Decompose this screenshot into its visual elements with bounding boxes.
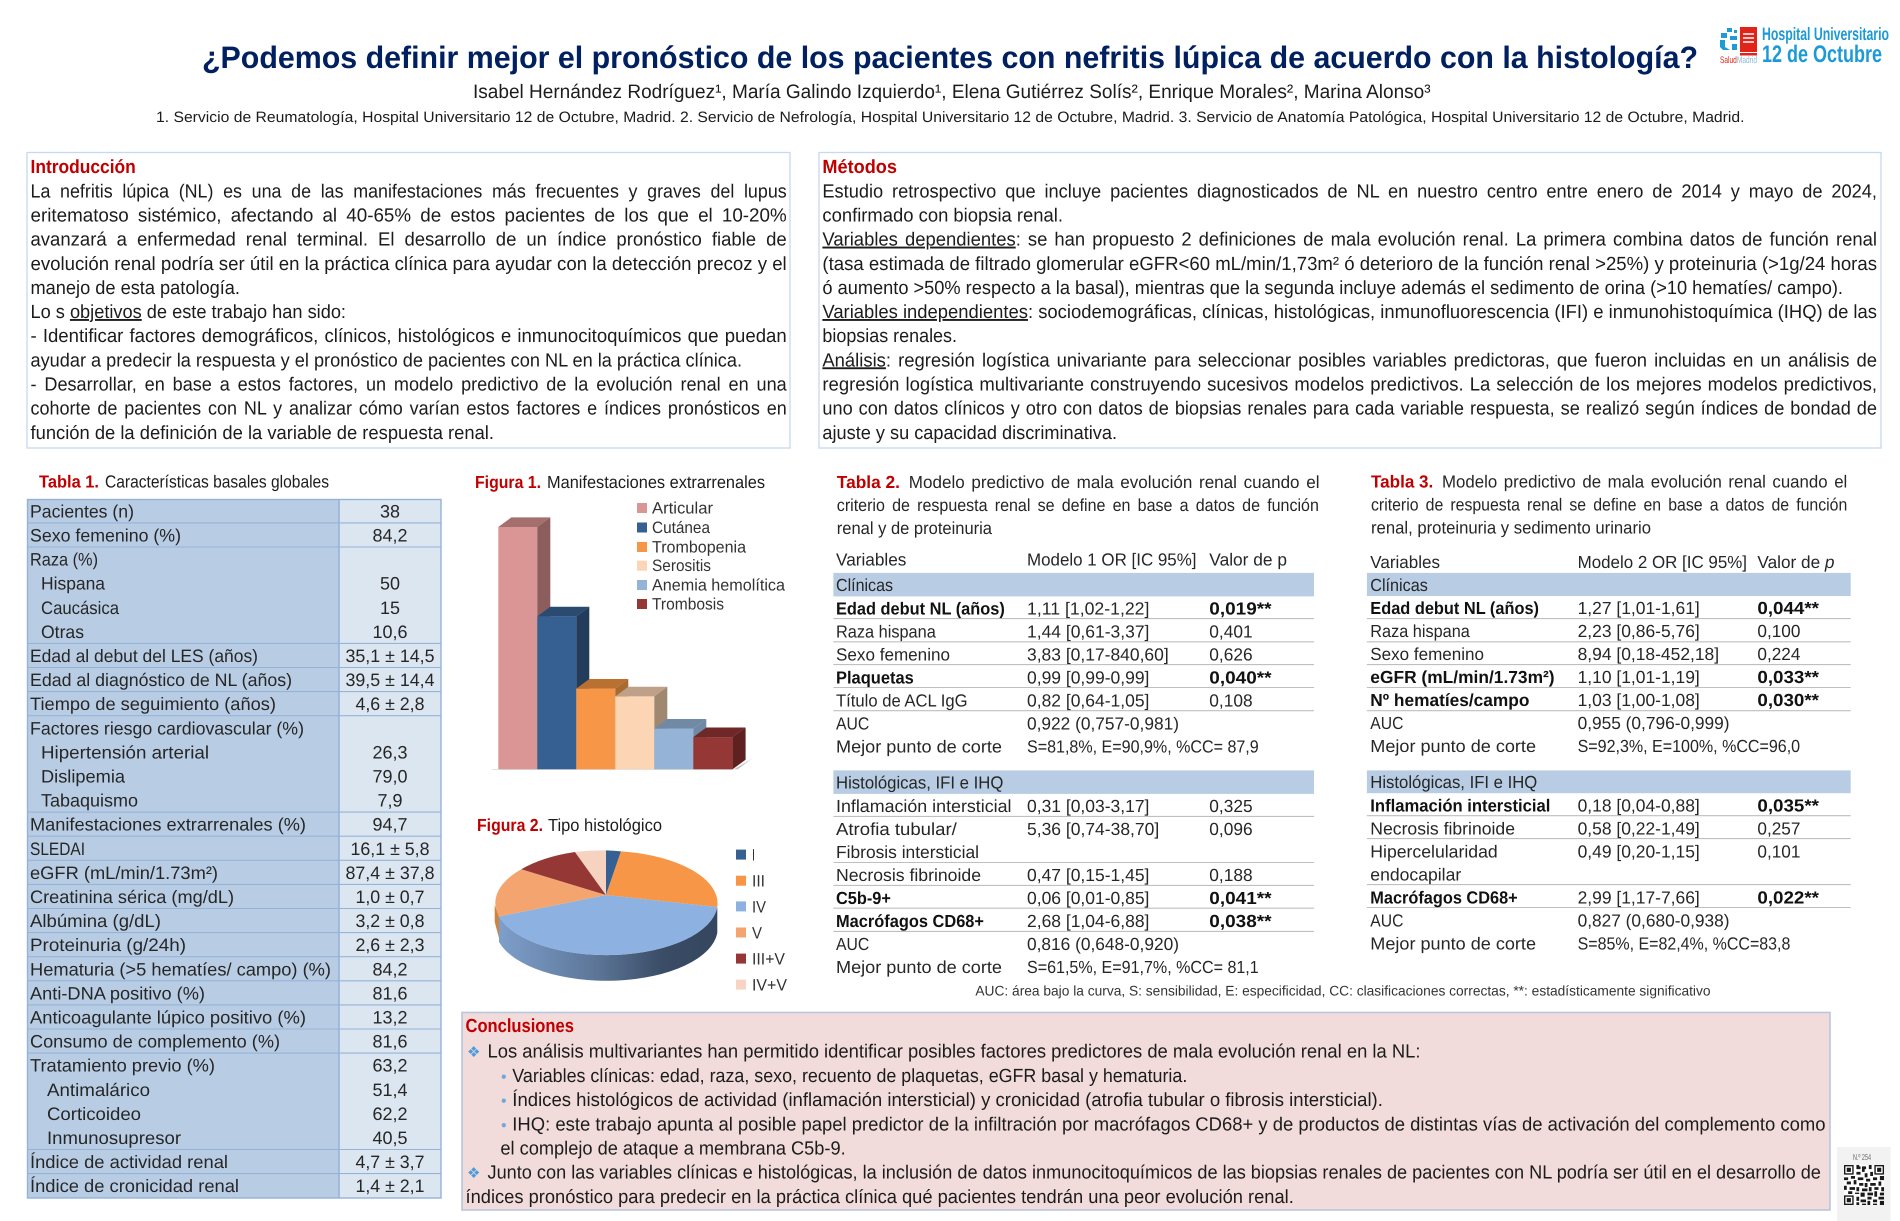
text block: introducción: avanzará a enfermedad renal terminal. El desarrollo de un índice pronóstico fiable de — [30, 230, 787, 251]
table values: tabla 1: 84,2 — [372, 526, 408, 546]
heading: tabla 2: Tabla 2. — [837, 472, 900, 492]
text block: métodos: regresión logística multivariante construyendo sucesivos modelos predictivos. La selección de los mejores modelos predictivos, — [822, 374, 1877, 396]
table column: variables, tabla 2: Edad debut NL (años) — [836, 598, 1005, 618]
table column: modelo 2, tabla 3: 2,23 [0,86-5,76] — [1578, 621, 1700, 641]
table column: valor de p, tabla 3: 0,101 — [1757, 841, 1800, 861]
table values: tabla 1: 79,0 — [372, 766, 408, 786]
text block: métodos: ó aumento >50% respecto a la basal), mientras que la segunda incluye además el sedimento de orina (>10 hematíes/ campo). — [822, 278, 1843, 299]
table column: variables, tabla 2: Necrosis fibrinoide — [836, 865, 981, 885]
table column: variables, tabla 3: Macrófagos CD68+ — [1370, 887, 1518, 907]
table column: modelo 1, tabla 2: 0,816 (0,648-0,920) — [1027, 934, 1179, 954]
text block: métodos: Análisis: regresión logística univariante para seleccionar posibles variables predictoras, que fueron incluidas en un análisis de — [822, 350, 1877, 371]
table values: tabla 1: 87,4 ± 37,8 — [346, 863, 434, 883]
table column: variables, tabla 3: Variables — [1370, 552, 1440, 572]
table values: tabla 1: 38 — [380, 501, 400, 521]
table column: valor de p, tabla 3: 0,030** — [1757, 690, 1819, 710]
table column: variables, tabla 3: Histológicas, IFI e IHQ — [1370, 772, 1537, 792]
legend: figura 1: Trombopenia — [652, 538, 747, 556]
text block: métodos: (tasa estimada de filtrado glomerular eGFR<60 mL/min/1,73m² ó deterioro de la función renal >25%) y proteinuria (>1g/24 horas — [822, 254, 1877, 275]
panel: tabla 3 — [1367, 472, 1851, 953]
text block: conclusiones: Variables clínicas: edad, raza, sexo, recuento de plaquetas, eGFR basal y hematuria. — [512, 1066, 1187, 1087]
heading: tabla 3 — [1371, 472, 1847, 538]
table values: tabla 1: 7,9 — [378, 791, 402, 811]
table column: valor de p, tabla 2: 0,038** — [1209, 911, 1272, 931]
table column: modelo 1, tabla 2: S=61,5%, E=91,7%, %CC= 81,1 — [1027, 957, 1259, 977]
table column: variables, tabla 2: Sexo femenino — [836, 644, 950, 664]
table column: modelo 2, tabla 3: 1,10 [1,01-1,19] — [1578, 667, 1700, 687]
table column: modelo 2, tabla 3: 0,955 (0,796-0,999) — [1578, 713, 1730, 733]
text block: conclusiones: • — [501, 1117, 507, 1134]
table column: modelo 1, tabla 2: 0,31 [0,03-3,17] — [1027, 796, 1149, 816]
table column: valor de p, tabla 3: 0,022** — [1757, 887, 1819, 907]
table column: valor de p, tabla 2 — [1209, 549, 1287, 931]
table column: variables, tabla 2: Mejor punto de corte — [836, 736, 1002, 756]
logo: Hospital Universitario 12 de Octubre — [1720, 24, 1889, 68]
panel: métodos — [819, 152, 1881, 448]
table column: modelo 1, tabla 2: 0,82 [0,64-1,05] — [1027, 690, 1149, 710]
legend: figura 2: III+V — [752, 950, 785, 968]
text block: conclusiones: ❖ — [467, 1164, 480, 1182]
table values: tabla 1: 3,2 ± 0,8 — [356, 911, 424, 931]
text block: conclusiones: Junto con las variables clínicas e histológicas, la inclusión de datos inmunocitoquímicos de las biopsias renales de pacientes con NL podría ser útil en el desarrollo de — [488, 1163, 1821, 1184]
table column: variables, tabla 2: Fibrosis intersticial — [836, 842, 979, 862]
authors: Isabel Hernández Rodríguez¹, María Galindo Izquierdo¹, Elena Gutiérrez Solís², Enrique Morales², Marina Alonso³ — [473, 81, 1431, 103]
table column: modelo 2, tabla 3: S=92,3%, E=100%, %CC=96,0 — [1578, 736, 1800, 756]
heading: tabla 2 — [837, 472, 1320, 538]
table row labels: tabla 1: SLEDAI — [30, 839, 85, 859]
panel: tabla 1 — [27, 472, 441, 1198]
table column: variables, tabla 3: Edad debut NL (años) — [1370, 598, 1539, 618]
text block: introducción: manejo de esta patología. — [30, 278, 240, 299]
heading: figura 2: Figura 2. — [477, 815, 543, 835]
table bands and separators: tabla 2 — [833, 573, 1314, 931]
text block: conclusiones: índices pronóstico para predecir en la práctica clínica qué pacientes tendrán una peor evolución renal. — [466, 1187, 1294, 1208]
table column: variables, tabla 3: Necrosis fibrinoide — [1370, 818, 1515, 838]
table column: modelo 1, tabla 2: 0,47 [0,15-1,45] — [1027, 865, 1149, 885]
table row labels: tabla 1: Tiempo de seguimiento (años) — [30, 694, 276, 714]
heading: tabla 2: criterio de respuesta renal se define en base a datos de función — [837, 495, 1319, 515]
table row labels: tabla 1: Caucásica — [41, 598, 120, 618]
table column: variables, tabla 2: Inflamación intersticial — [836, 796, 1012, 816]
table values: tabla 1: 16,1 ± 5,8 — [350, 839, 430, 859]
table column: variables, tabla 3: Mejor punto de corte — [1370, 933, 1536, 953]
table values: tabla 1: 26,3 — [372, 742, 408, 762]
text block: introducción — [30, 181, 787, 444]
text block: conclusiones — [466, 1042, 1826, 1208]
table column: valor de p, tabla 3: 0,100 — [1757, 621, 1801, 641]
table column: valor de p, tabla 2: 0,188 — [1209, 865, 1253, 885]
text block: conclusiones: Índices histológicos de actividad (inflamación intersticial) y cronicidad (atrofia tubular o fibrosis intersticial). — [512, 1089, 1383, 1111]
heading: métodos: Métodos — [822, 157, 897, 178]
table column: modelo 2, tabla 3: 0,49 [0,20-1,15] — [1578, 841, 1700, 861]
text block: métodos: biopsias renales. — [822, 326, 957, 347]
table column: valor de p, tabla 3: 0,257 — [1757, 818, 1800, 838]
panel: conclusiones — [462, 1012, 1830, 1210]
table column: variables, tabla 3: Inflamación intersticial — [1370, 795, 1550, 815]
text block: introducción: función de la definición de la variable de respuesta renal. — [30, 423, 494, 444]
text block: introducción: La nefritis lúpica (NL) es una de las manifestaciones más frecuentes y graves del lupus — [30, 181, 787, 202]
text block: introducción: - Identificar factores demográficos, clínicos, histológicos e inmunocitoquímicos que puedan — [30, 326, 787, 347]
icon: QR code — [1844, 1165, 1884, 1205]
table column: modelo 1, tabla 2: 1,11 [1,02-1,22] — [1027, 598, 1149, 618]
legend: figura 2 — [736, 846, 787, 994]
text block: conclusiones: IHQ: este trabajo apunta al posible papel predictor de la infiltración por macrófagos CD68+ y de productos de distintas vías de activación del complemento como — [512, 1114, 1825, 1135]
table column: variables, tabla 3: Nº hematíes/campo — [1370, 690, 1529, 710]
table row labels: tabla 1: Consumo de complemento (%) — [30, 1032, 280, 1052]
legend: figura 1: Serositis — [652, 557, 711, 575]
table values: tabla 1: 81,6 — [372, 1032, 408, 1052]
table values: tabla 1: 1,0 ± 0,7 — [356, 887, 424, 907]
table values: tabla 1: 10,6 — [372, 622, 408, 642]
table column: variables, tabla 3: AUC — [1370, 910, 1403, 930]
logo: Hospital Universitario 12 de Octubre: SaludMadrid — [1720, 55, 1757, 66]
table row labels: tabla 1: Edad al diagnóstico de NL (años) — [30, 670, 292, 690]
table row labels: tabla 1: Índice de actividad renal — [30, 1152, 228, 1172]
text block: métodos: ajuste y su capacidad discriminativa. — [822, 423, 1117, 444]
table row labels: tabla 1: Pacientes (n) — [30, 501, 134, 521]
legend: figura 2: IV — [752, 898, 766, 916]
heading: tabla 3: Tabla 3. — [1371, 472, 1433, 492]
table grid: tabla 1 — [27, 499, 441, 1198]
heading: tabla 1: Tabla 1. — [39, 472, 99, 492]
panel: figura 2 — [477, 815, 787, 994]
table values: tabla 1: 4,6 ± 2,8 — [356, 694, 424, 714]
table row labels: tabla 1: Hipertensión arterial — [41, 742, 209, 762]
table column: modelo 2, tabla 3: 0,18 [0,04-0,88] — [1578, 795, 1700, 815]
icon: Salud Madrid symbol — [1720, 27, 1757, 56]
table row labels: tabla 1: Sexo femenino (%) — [30, 526, 181, 546]
table column: modelo 1, tabla 2: 0,922 (0,757-0,981) — [1027, 713, 1179, 733]
table column: valor de p, tabla 3: 0,044** — [1757, 598, 1819, 618]
table column: variables, tabla 2: Raza hispana — [836, 621, 936, 641]
heading: tabla 3: renal, proteinuria y sedimento urinario — [1371, 518, 1651, 538]
legend: figura 2: V — [752, 924, 762, 942]
table row labels: tabla 1: Creatinina sérica (mg/dL) — [30, 887, 234, 907]
table column: valor de p, tabla 2: 0,626 — [1209, 644, 1253, 664]
text block: métodos: Variables dependientes: se han propuesto 2 definiciones de mala evolución renal. La primera combina datos de función renal — [822, 230, 1877, 251]
table column: variables, tabla 2: Macrófagos CD68+ — [836, 911, 984, 931]
table column: variables, tabla 3: eGFR (mL/min/1.73m²) — [1370, 667, 1555, 687]
heading: conclusiones: Conclusiones — [466, 1016, 574, 1037]
text block: introducción: cohorte de pacientes con NL y analizar cómo varían estos factores e índices pronósticos en — [30, 399, 787, 420]
panel: tabla 2 — [833, 472, 1320, 977]
legend: figura 1: Articular — [652, 500, 714, 518]
affiliations: 1. Servicio de Reumatología, Hospital Universitario 12 de Octubre, Madrid. 2. Servicio de Nefrología, Hospital Universitario 12 de Octubre, Madrid. 3. Servicio de Anatomía Patológica, Hospital Universitario 12 de Octubre, Madrid. — [156, 109, 1744, 126]
table column: modelo 1, tabla 2: Modelo 1 OR [IC 95%] — [1027, 549, 1196, 569]
heading: tabla 2: renal y de proteinuria — [837, 518, 992, 538]
table column: variables, tabla 2: Clínicas — [836, 575, 893, 595]
table column: variables, tabla 2: Título de ACL IgG — [836, 690, 968, 710]
text block: introducción: eritematoso sistémico, afectando al 40-65% de estos pacientes de los que el 10-20% — [30, 206, 787, 226]
text block: introducción: - Desarrollar, en base a estos factores, un modelo predictivo de la evolución renal en una — [30, 374, 787, 396]
table row labels: tabla 1: Índice de cronicidad renal — [30, 1176, 239, 1196]
table column: valor de p, tabla 2: 0,108 — [1209, 690, 1253, 710]
text block: introducción: Lo s objetivos de este trabajo han sido: — [30, 302, 346, 323]
text block: métodos: uno con datos clínicos y otro con datos de biopsias renales para cada variable respuesta, se realizó según índices de bondad de — [822, 399, 1877, 420]
text block: conclusiones: el complejo de ataque a membrana C5b-9. — [500, 1138, 846, 1160]
table row labels: tabla 1: Otras — [41, 622, 84, 642]
table row labels: tabla 1: Anti-DNA positivo (%) — [30, 983, 205, 1003]
table row labels: tabla 1: Corticoideo — [47, 1104, 141, 1124]
heading: tabla 3: criterio de respuesta renal se define en base a datos de función — [1371, 495, 1847, 515]
table column: modelo 2, tabla 3: 0,827 (0,680-0,938) — [1578, 910, 1730, 930]
legend: figura 2: IV+V — [752, 976, 787, 994]
panel: código QR — [1837, 1147, 1891, 1221]
table column: variables, tabla 3: Raza hispana — [1370, 621, 1470, 641]
table values: tabla 1: 81,6 — [372, 983, 408, 1003]
heading: figura 2 — [477, 815, 662, 835]
legend: figura 2: III — [752, 873, 765, 891]
footnote: abreviaturas: AUC: área bajo la curva, S: sensibilidad, E: especificidad, CC: clasificaciones correctas, **: estadísticamente significativo — [975, 983, 1711, 999]
table column: variables, tabla 2: Atrofia tubular/ — [836, 819, 957, 839]
table values: tabla 1: 15 — [380, 598, 400, 618]
heading: tabla 2: Modelo predictivo de mala evolución renal cuando el — [909, 472, 1320, 492]
table column: variables, tabla 3: Clínicas — [1370, 575, 1428, 595]
table row labels: tabla 1: Tabaquismo — [41, 791, 138, 811]
table column: valor de p, tabla 2: 0,096 — [1209, 819, 1253, 839]
table row labels: tabla 1: Dislipemia — [41, 766, 126, 786]
table column: variables, tabla 3: Mejor punto de corte — [1370, 736, 1536, 756]
table column: modelo 1, tabla 2: 2,68 [1,04-6,88] — [1027, 911, 1149, 931]
table column: modelo 1, tabla 2: 1,44 [0,61-3,37] — [1027, 621, 1149, 641]
text block: conclusiones: ❖ — [467, 1043, 480, 1061]
legend: figura 1: Anemia hemolítica — [652, 576, 786, 594]
table column: modelo 2, tabla 3: 0,58 [0,22-1,49] — [1578, 818, 1700, 838]
table values: tabla 1: 62,2 — [372, 1104, 408, 1124]
table values: tabla 1: 94,7 — [372, 815, 408, 835]
table row labels: tabla 1: Inmunosupresor — [47, 1128, 181, 1148]
table row labels: tabla 1: Factores riesgo cardiovascular (%) — [30, 718, 304, 738]
text block: métodos: Variables independientes: sociodemográficas, clínicas, histológicas, inmunofluorescencia (IFI) e inmunohistoquímica (IHQ) de las — [822, 302, 1877, 323]
table column: modelo 2, tabla 3: 2,99 [1,17-7,66] — [1578, 887, 1700, 907]
table column: variables, tabla 2: AUC — [836, 934, 869, 954]
table column: variables, tabla 3: AUC — [1370, 713, 1403, 733]
heading: figura 1: Manifestaciones extrarrenales — [547, 472, 765, 492]
table row labels: tabla 1: Edad al debut del LES (años) — [30, 646, 258, 666]
table column: modelo 2, tabla 3: 1,27 [1,01-1,61] — [1578, 598, 1700, 618]
table column: variables, tabla 3: Hipercelularidad — [1370, 841, 1498, 861]
text block: conclusiones: • — [501, 1069, 507, 1086]
table column: valor de p, tabla 3: 0,224 — [1757, 644, 1801, 664]
table column: variables, tabla 3: endocapilar — [1370, 864, 1461, 884]
panel: introducción — [27, 152, 790, 448]
table column: variables, tabla 3: Sexo femenino — [1370, 644, 1484, 664]
table column: variables, tabla 2: Plaquetas — [836, 667, 914, 687]
table column: variables, tabla 2: C5b-9+ — [836, 888, 891, 908]
table column: variables, tabla 2: AUC — [836, 713, 869, 733]
text block: introducción: evolución renal podría ser útil en la práctica clínica para ayudar con la detección precoz y el — [30, 254, 787, 275]
table column: valor de p, tabla 3: 0,033** — [1757, 667, 1819, 687]
table row labels: tabla 1: Proteinuria (g/24h) — [30, 935, 186, 955]
table values: tabla 1: 4,7 ± 3,7 — [356, 1152, 424, 1172]
table row labels: tabla 1 — [30, 501, 331, 1196]
table column: variables, tabla 2: Mejor punto de corte — [836, 957, 1002, 977]
table row labels: tabla 1: Manifestaciones extrarrenales (%) — [30, 815, 306, 835]
table column: modelo 1, tabla 2 — [1027, 549, 1259, 977]
text block: conclusiones: Los análisis multivariantes han permitido identificar posibles factores predictores de mala evolución renal en la NL: — [488, 1042, 1420, 1063]
table values: tabla 1: 63,2 — [372, 1056, 408, 1076]
table column: modelo 1, tabla 2: S=81,8%, E=90,9%, %CC= 87,9 — [1027, 736, 1259, 756]
table column: valor de p, tabla 2: 0,019** — [1209, 598, 1272, 618]
table values: tabla 1: 39,5 ± 14,4 — [346, 670, 434, 690]
table row labels: tabla 1: Antimalárico — [47, 1080, 150, 1100]
table row labels: tabla 1: Tratamiento previo (%) — [30, 1056, 215, 1076]
table column: modelo 1, tabla 2: 3,83 [0,17-840,60] — [1027, 644, 1169, 664]
table values: tabla 1: 2,6 ± 2,3 — [356, 935, 424, 955]
pie chart: tipo histológico — [495, 850, 718, 981]
text block: métodos: Estudio retrospectivo que incluye pacientes diagnosticados de NL en nuestro centro entre enero de 2014 y mayo de 2024, — [822, 181, 1877, 202]
table row labels: tabla 1: Hematuria (>5 hematíes/ campo) (%) — [30, 959, 331, 979]
table column: modelo 2, tabla 3: S=85%, E=82,4%, %CC=83,8 — [1578, 933, 1790, 953]
heading: tabla 3: Modelo predictivo de mala evolución renal cuando el — [1442, 472, 1847, 492]
bar chart: manifestaciones extrarrenales — [492, 517, 752, 770]
table values: tabla 1 — [346, 501, 434, 1196]
table column: modelo 1, tabla 2: 0,99 [0,99-0,99] — [1027, 667, 1149, 687]
table values: tabla 1: 35,1 ± 14,5 — [346, 646, 434, 666]
legend: figura 1: Cutánea — [652, 519, 711, 537]
table column: modelo 1, tabla 2: 5,36 [0,74-38,70] — [1027, 819, 1159, 839]
table column: valor de p, tabla 2: Valor de p — [1209, 549, 1287, 569]
table column: modelo 1, tabla 2: 0,06 [0,01-0,85] — [1027, 888, 1149, 908]
table values: tabla 1: 84,2 — [372, 959, 408, 979]
table column: valor de p, tabla 2: 0,325 — [1209, 796, 1253, 816]
heading: introducción: Introducción — [30, 157, 136, 178]
table column: variables, tabla 2: Variables — [836, 549, 907, 569]
table bands and separators: tabla 3 — [1367, 573, 1851, 908]
table values: tabla 1: 40,5 — [372, 1128, 408, 1148]
table column: valor de p, tabla 2: 0,041** — [1209, 888, 1272, 908]
table row labels: tabla 1: Hispana — [41, 574, 106, 594]
table column: variables, tabla 2: Histológicas, IFI e IHQ — [836, 773, 1003, 793]
table column: valor de p, tabla 3: Valor de p — [1757, 552, 1835, 572]
table column: valor de p, tabla 2: 0,401 — [1209, 621, 1253, 641]
heading: figura 1: Figura 1. — [475, 472, 541, 492]
table row labels: tabla 1: Anticoagulante lúpico positivo (%) — [30, 1008, 306, 1028]
title: ¿Podemos definir mejor el pronóstico de los pacientes con nefritis lúpica de acuerdo con la histología? — [202, 40, 1698, 75]
text block: conclusiones: • — [501, 1093, 507, 1110]
table values: tabla 1: 13,2 — [372, 1008, 408, 1028]
text block: métodos — [822, 181, 1877, 444]
legend: figura 2: I — [752, 846, 755, 864]
table row labels: tabla 1: eGFR (mL/min/1.73m²) — [30, 863, 218, 883]
table column: valor de p, tabla 2: 0,040** — [1209, 667, 1272, 687]
table values: tabla 1: 50 — [380, 574, 400, 594]
table column: variables, tabla 3 — [1370, 552, 1555, 953]
table values: tabla 1: 51,4 — [372, 1080, 408, 1100]
table row labels: tabla 1: Albúmina (g/dL) — [30, 911, 161, 931]
table column: valor de p, tabla 3 — [1757, 552, 1835, 907]
legend: figura 1: Trombosis — [652, 596, 724, 614]
poster number: N.º 254 — [1853, 1152, 1871, 1162]
table column: variables, tabla 2 — [836, 549, 1012, 977]
table column: modelo 2, tabla 3: 8,94 [0,18-452,18] — [1578, 644, 1719, 664]
table column: modelo 2, tabla 3: Modelo 2 OR [IC 95%] — [1578, 552, 1747, 572]
text block: introducción: ayudar a predecir la respuesta y el pronóstico de pacientes con NL en la práctica clínica. — [30, 350, 742, 371]
legend: figura 1 — [637, 500, 786, 614]
heading: figura 2: Tipo histológico — [548, 815, 662, 835]
panel: figura 1 — [475, 472, 786, 770]
heading: tabla 1: Características basales globales — [105, 472, 329, 492]
table column: valor de p, tabla 3: 0,035** — [1757, 795, 1819, 815]
table column: modelo 2, tabla 3 — [1578, 552, 1800, 953]
table row labels: tabla 1: Raza (%) — [30, 550, 98, 570]
table values: tabla 1: 1,4 ± 2,1 — [356, 1176, 424, 1196]
text block: métodos: confirmado con biopsia renal. — [822, 206, 1063, 226]
table column: modelo 2, tabla 3: 1,03 [1,00-1,08] — [1578, 690, 1700, 710]
